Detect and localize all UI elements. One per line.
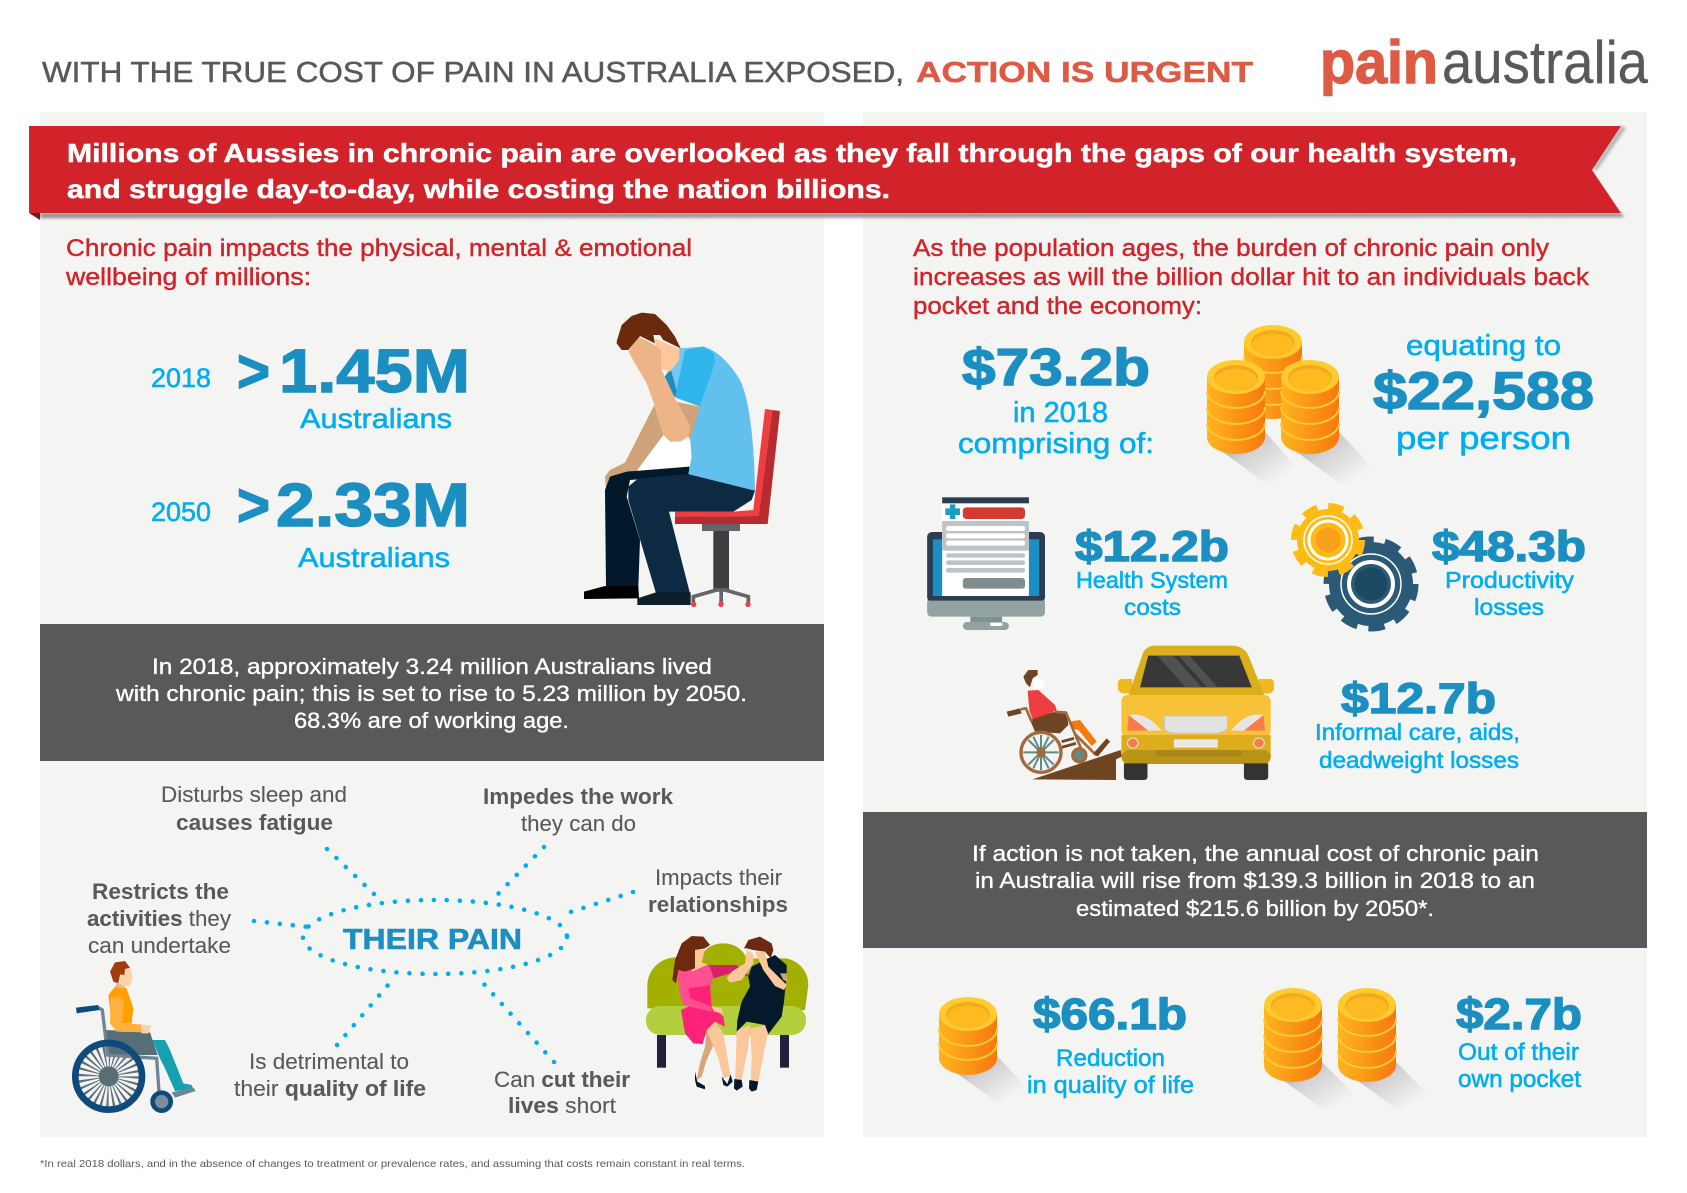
text: cut lives short	[494, 1067, 630, 1118]
stat: 12.2b health system costs: Health System	[1076, 567, 1228, 593]
text: disturbs sleep	[161, 782, 347, 835]
text: impedes the work	[483, 784, 673, 836]
stat: 73.2b: in 2018	[1013, 397, 1108, 429]
icon: yellow car	[1118, 646, 1274, 780]
text: cut lives short: Can cut their	[494, 1067, 630, 1092]
grey callout left: with chronic pain; this is set to rise to 5.23 million by 2050.	[115, 681, 747, 706]
icon: wheelchair user on ramp	[1007, 670, 1122, 780]
stat: 12.2b health system costs: $12.2b	[1075, 523, 1229, 571]
right heading: increases as will the billion dollar hit to an individuals back	[913, 264, 1590, 291]
left heading: wellbeing of millions:	[65, 264, 311, 291]
stat: 2018 1.45M: 2018	[151, 363, 211, 393]
stat: 2.7b out of their own pocket: $2.7b	[1456, 990, 1582, 1039]
icon: gears	[1295, 507, 1414, 627]
grey callout right	[863, 812, 1647, 948]
text: restricts activities: activities they	[87, 906, 232, 931]
stat: 48.3b productivity losses: $48.3b	[1432, 523, 1586, 571]
stat: 66.1b reduction in quality of life	[1027, 990, 1194, 1099]
left heading	[65, 235, 692, 291]
icon: monitor with medical record	[927, 497, 1045, 630]
stat: 22,588 per person: equating to	[1406, 330, 1561, 362]
stat: 66.1b reduction in quality of life: Reduction	[1056, 1045, 1165, 1072]
right heading: As the population ages, the burden of chronic pain only	[913, 235, 1549, 262]
text: impedes the work: Impedes the work	[483, 784, 673, 809]
panel: right background	[863, 112, 1647, 1137]
stat: 2.7b out of their own pocket: own pocket	[1458, 1066, 1581, 1093]
icon: gold coin stacks	[1207, 325, 1382, 492]
stat: 12.2b health system costs	[1075, 523, 1229, 620]
text: restricts activities: Restricts the	[92, 879, 229, 904]
stat: 48.3b productivity losses	[1432, 523, 1586, 620]
stat: 2018 1.45M: 1.45M	[279, 337, 470, 405]
stat: 48.3b productivity losses: Productivity	[1445, 567, 1575, 593]
stat: 48.3b productivity losses: losses	[1474, 594, 1544, 620]
stat: 2050 2.33M: Australians	[298, 542, 450, 573]
stat: 2.7b out of their own pocket	[1456, 990, 1582, 1093]
title: WITH THE TRUE COST OF PAIN IN AUSTRALIA EXPOSED,	[42, 57, 904, 89]
right heading: pocket and the economy:	[913, 293, 1202, 320]
stat: 12.7b informal care: deadweight losses	[1319, 747, 1519, 773]
stat: 22,588 per person: $22,588	[1373, 362, 1594, 421]
text: disturbs sleep: causes fatigue	[176, 810, 333, 835]
diagram: their pain dotted mind map	[254, 847, 633, 1062]
logo: painaustralia: australia	[1442, 29, 1649, 96]
stat: 66.1b reduction in quality of life: $66.1b	[1033, 990, 1187, 1039]
grey callout right: estimated $215.6 billion by 2050*.	[1076, 896, 1434, 921]
text: disturbs sleep: Disturbs sleep and	[161, 782, 347, 807]
stat: 2050 2.33M	[151, 471, 470, 573]
banner text: Millions of Aussies in chronic pain are overlooked as they fall through the gaps of our health system,	[67, 138, 1517, 168]
text: restricts activities	[87, 879, 232, 958]
title: ACTION IS URGENT	[916, 57, 1253, 89]
icon: man in pain seated on chair	[584, 313, 780, 607]
stat: 2018 1.45M: >	[237, 337, 270, 405]
right heading	[913, 235, 1590, 320]
stat: 73.2b: $73.2b	[962, 339, 1150, 397]
text: quality of life: Is detrimental to	[249, 1049, 409, 1074]
text: impacts relationships	[648, 865, 788, 917]
title	[42, 57, 1253, 89]
grey callout left	[40, 624, 824, 761]
icon: single coin stack	[939, 997, 1034, 1110]
stat: 2050 2.33M: 2050	[151, 497, 211, 527]
stat: 12.7b informal care	[1315, 675, 1520, 773]
text: quality of life	[234, 1049, 426, 1101]
stat: 2050 2.33M: >	[237, 471, 270, 539]
stat: 22,588 per person	[1373, 330, 1594, 456]
grey callout right: If action is not taken, the annual cost of chronic pain	[972, 841, 1539, 866]
stat: 66.1b reduction in quality of life: in quality of life	[1027, 1072, 1194, 1099]
stat: 12.7b informal care: $12.7b	[1341, 675, 1496, 723]
icon: person in wheelchair	[75, 961, 196, 1111]
banner text: and struggle day-to-day, while costing the nation billions.	[67, 174, 890, 204]
logo: painaustralia: pain	[1320, 29, 1438, 96]
text: restricts activities: can undertake	[88, 933, 231, 958]
grey callout left: 68.3% are of working age.	[294, 708, 569, 733]
grey callout left: In 2018, approximately 3.24 million Australians lived	[152, 654, 712, 679]
stat: 2018 1.45M: Australians	[300, 403, 452, 434]
text: quality of life: their quality of life	[234, 1076, 426, 1101]
stat: 73.2b	[958, 339, 1154, 460]
text: impacts relationships: Impacts their	[655, 865, 782, 890]
footnote: *In real 2018 dollars, and in the absence of changes to treatment or prevalence rates, and assuming that costs remain constant in real terms.	[40, 1158, 745, 1170]
text: impacts relationships: relationships	[648, 892, 788, 917]
logo: painaustralia	[1320, 29, 1649, 96]
text: cut lives short: lives short	[508, 1093, 617, 1118]
left heading: Chronic pain impacts the physical, mental & emotional	[66, 235, 692, 262]
stat: 22,588 per person: per person	[1396, 420, 1571, 456]
panel: left background	[40, 112, 824, 1137]
stat: 2.7b out of their own pocket: Out of their	[1458, 1039, 1579, 1066]
stat: 2018 1.45M	[151, 337, 470, 434]
icon: double coin stacks	[1264, 988, 1436, 1118]
stat: 12.7b informal care: Informal care, aids,	[1315, 719, 1520, 745]
stat: 12.2b health system costs: costs	[1124, 594, 1181, 620]
stat: 73.2b: comprising of:	[958, 428, 1154, 460]
label: their pain: THEIR PAIN	[343, 924, 522, 956]
banner text	[67, 138, 1517, 204]
grey callout right: in Australia will rise from $139.3 billion in 2018 to an	[975, 868, 1535, 893]
text: impedes the work: they can do	[521, 811, 636, 836]
icon: couple on sofa	[646, 936, 808, 1092]
red ribbon banner	[29, 126, 1626, 220]
stat: 2050 2.33M: 2.33M	[276, 471, 470, 539]
